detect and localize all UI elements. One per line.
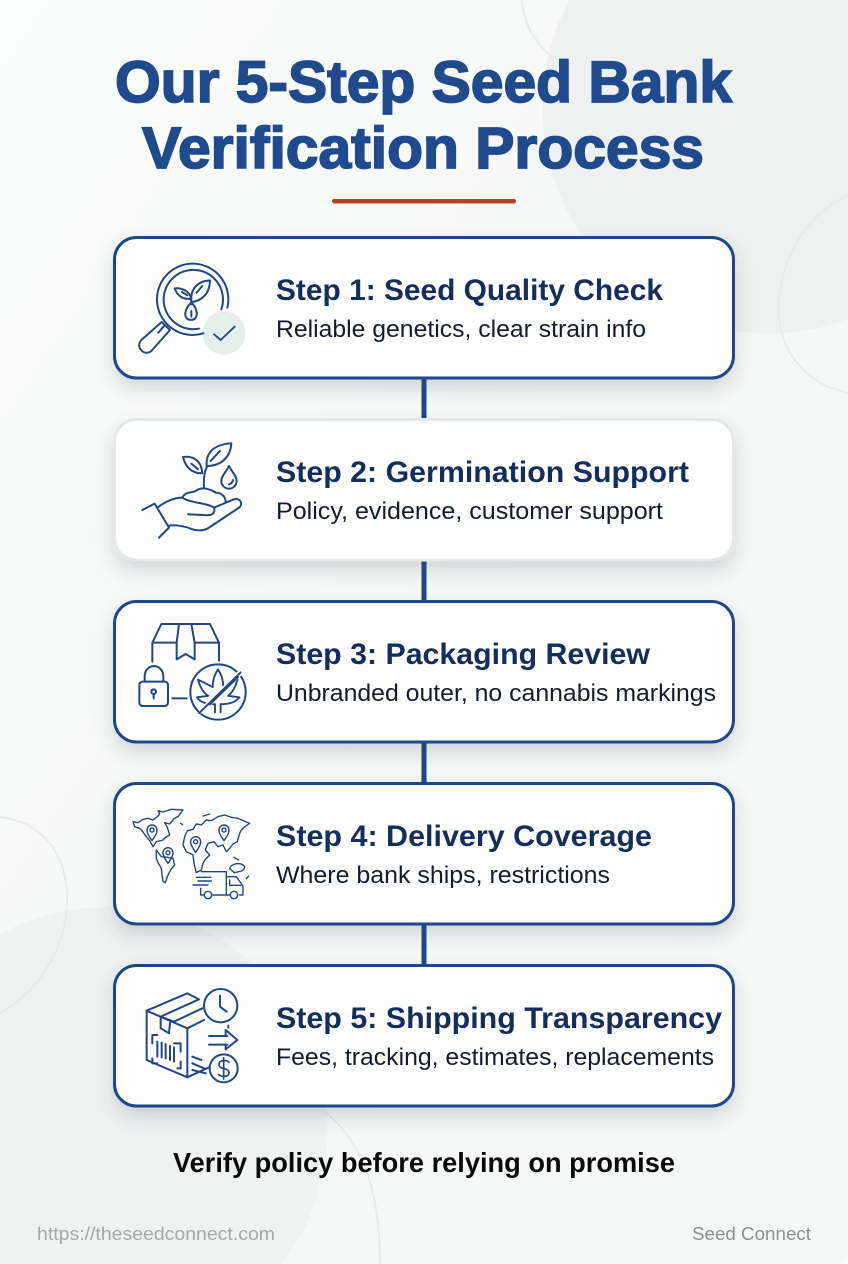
connector lines <box>422 378 426 966</box>
panel: step 4 <box>114 784 734 924</box>
icon: world map with pins and truck <box>133 809 250 899</box>
step 2 description: Policy, evidence, customer support <box>276 498 663 525</box>
step 4 heading: Step 4: Delivery Coverage <box>276 820 652 853</box>
title <box>115 50 733 181</box>
footer url: https://theseedconnect.com <box>37 1224 275 1244</box>
title: Our 5-Step Seed Bank <box>115 50 733 115</box>
panel: step 1 <box>114 238 734 378</box>
icon: hand holding seedling <box>142 443 241 538</box>
title: Verification Process <box>142 116 704 181</box>
step 1 heading: Step 1: Seed Quality Check <box>276 274 663 307</box>
step 3 heading: Step 3: Packaging Review <box>276 638 651 671</box>
step 4 description: Where bank ships, restrictions <box>276 862 610 889</box>
step 5 description: Fees, tracking, estimates, replacements <box>276 1044 714 1071</box>
icon: magnifying glass with seedling and check <box>139 264 246 355</box>
panel: step 2 <box>114 420 734 560</box>
title underline <box>332 199 516 204</box>
step 5 heading: Step 5: Shipping Transparency <box>276 1002 722 1035</box>
icon: unbranded package, lock, no cannabis <box>139 624 246 720</box>
closing statement: Verify policy before relying on promise <box>173 1147 675 1178</box>
icon: parcel with clock, arrow and dollar <box>147 989 238 1082</box>
step 1 description: Reliable genetics, clear strain info <box>276 316 646 343</box>
footer brand: Seed Connect <box>692 1224 811 1244</box>
step 2 heading: Step 2: Germination Support <box>276 456 689 489</box>
panel: step 3 <box>114 602 734 742</box>
panel: step 5 <box>114 966 734 1106</box>
step 3 description: Unbranded outer, no cannabis markings <box>276 680 716 707</box>
